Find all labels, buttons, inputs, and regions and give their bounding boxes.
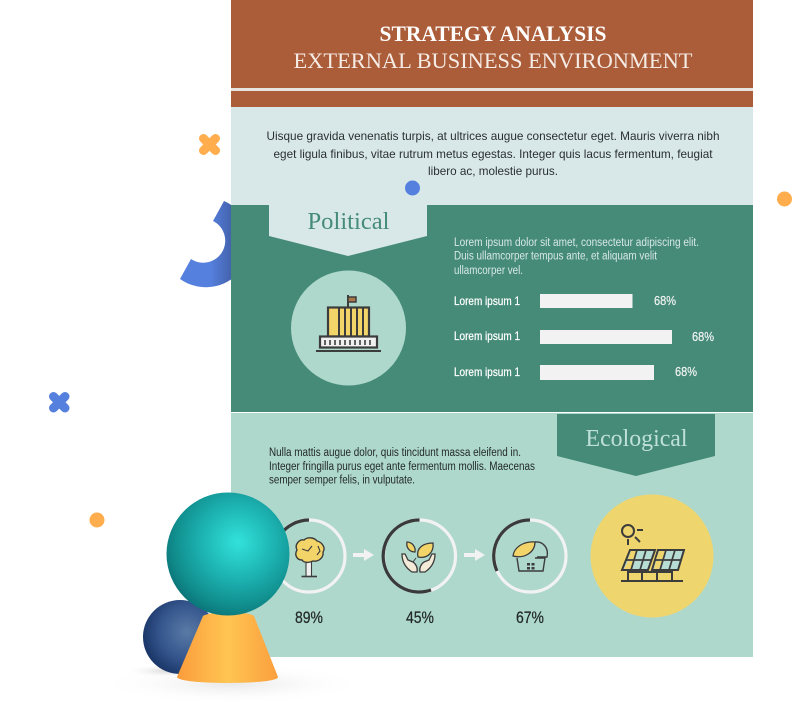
icon: hands and leaves [402,542,435,572]
bar chart: 68% [654,293,676,308]
decorative blue arc [180,201,231,288]
header panel [231,0,753,107]
bar chart: 68% [692,329,714,344]
political description: Duis ullamcorper tempus ante, et aliquam velit [454,250,658,262]
panel: political [231,204,753,412]
political description: Lorem ipsum dolor sit amet, consectetur adipiscing elit. [454,237,699,249]
blue dot [405,180,420,196]
ecological description: semper semper felis, in vulputate. [269,474,415,486]
icon: solar panels [590,494,714,618]
ring: 67% [494,520,566,627]
ecological banner: Ecological [586,426,688,452]
teal sphere [166,492,290,616]
ecological description: Integer fringilla purus eget ante fermentum mollis. Maecenas [269,461,535,473]
bar chart: 68% [675,364,697,379]
blue cross [54,396,65,408]
panel: intro: libero ac, molestie purus. [428,164,558,178]
title: STRATEGY ANALYSIS [380,21,606,46]
panel: intro: eget ligula finibus, vitae rutrum metus egestas. Integer quis lacus fermentum, feugiat [274,147,713,161]
bar chart: Lorem ipsum 1 [454,294,520,308]
orange cross [204,138,216,150]
political banner [269,204,427,256]
arrow 1 [353,549,374,561]
ring: 45% [383,520,456,627]
arrow 2 [464,549,485,561]
orange cone [177,612,278,683]
45% value: 45% [406,608,434,627]
icon: tree [296,538,324,576]
panel: ecological [231,413,753,657]
67% value: 67% [516,608,544,627]
political description [454,237,699,277]
political description: ullamcorper vel. [454,265,523,277]
bar chart: Lorem ipsum 1 [454,365,520,379]
panel: intro: Uisque gravida venenatis turpis, at ultrices augue consectetur eget. Mauris viverra nibh [266,129,720,143]
89% value: 89% [295,608,323,627]
ecological banner [557,414,715,476]
icon: eco house [513,542,547,571]
subtitle: EXTERNAL BUSINESS ENVIRONMENT [294,48,693,73]
orange dot right [777,192,792,206]
bar chart: Lorem ipsum 1 [454,329,520,343]
political banner: Political [308,209,390,235]
panel: intro [231,107,753,205]
ecological description: Nulla mattis augue dolor, quis tincidunt massa eleifend in. [269,447,521,459]
bar chart [454,293,714,380]
ring: 89% [273,520,345,627]
orange dot left [90,512,104,528]
icon: capitol building [291,270,406,386]
navy sphere [143,600,217,674]
ecological description [269,447,535,486]
3D shapes illustration [97,492,367,704]
